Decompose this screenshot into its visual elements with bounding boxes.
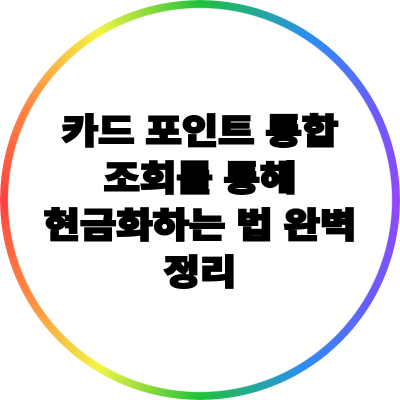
title: 현금화하는 법 완벽 xyxy=(44,207,356,245)
title: 카드 포인트 통합 xyxy=(62,113,338,151)
title: 조회를 통해 xyxy=(104,160,296,198)
title: 정리 xyxy=(164,254,236,292)
